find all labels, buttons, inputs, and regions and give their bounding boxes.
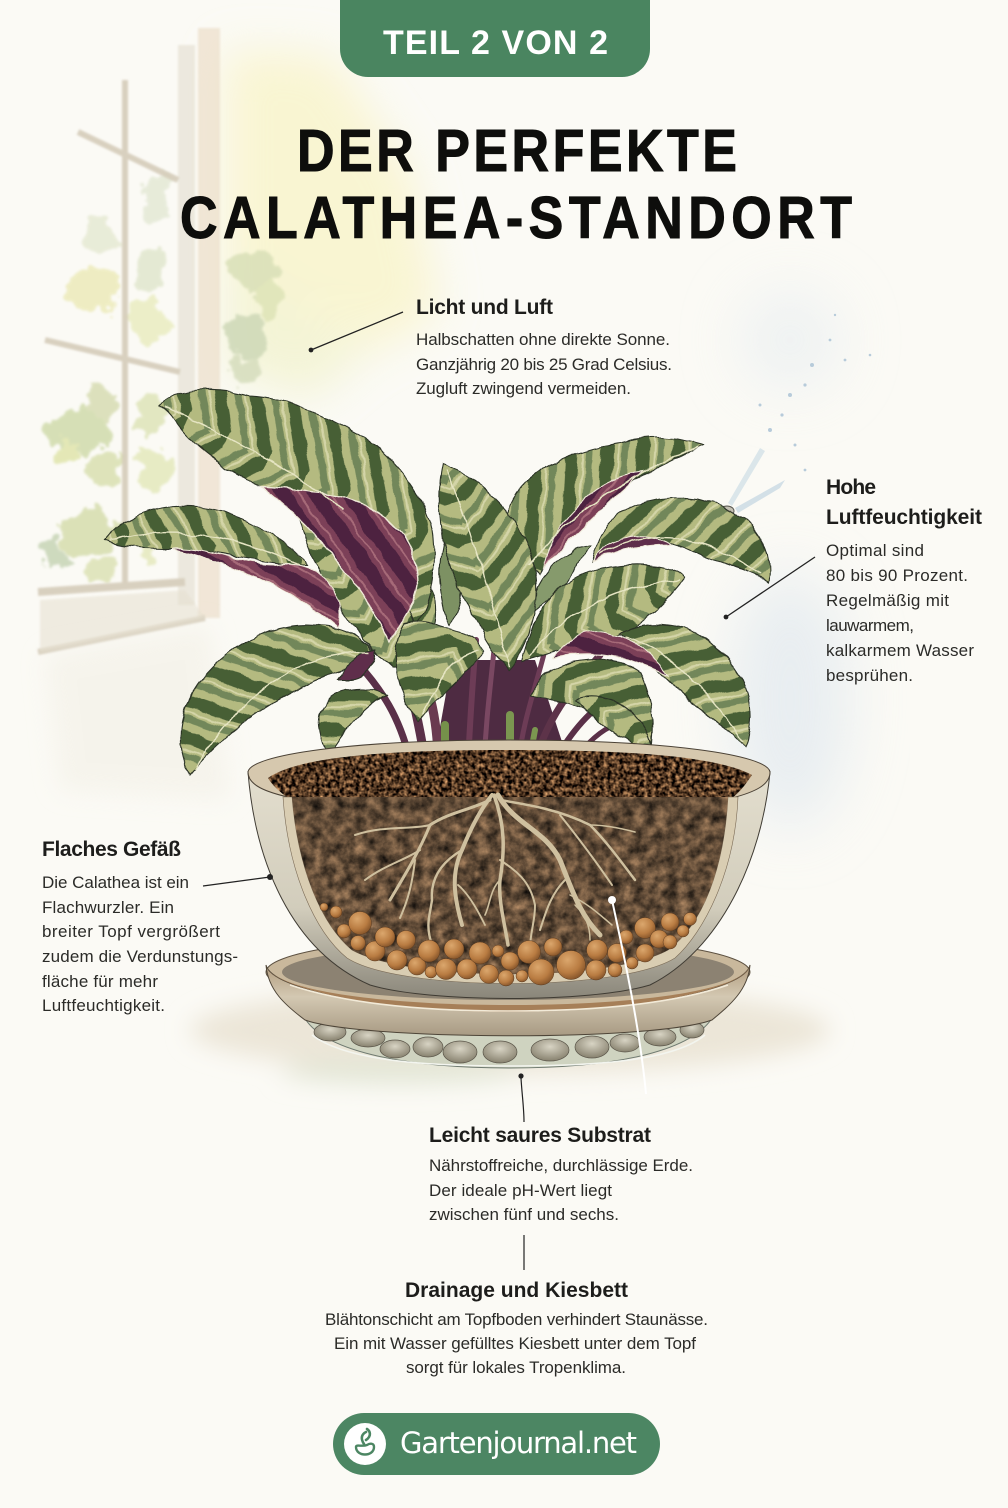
small back leaf, centre xyxy=(440,520,463,625)
sunlight wash xyxy=(225,50,440,400)
leaf 7 purple underside xyxy=(543,472,642,568)
callout: Leicht saures Substrat: Der ideale pH-Wert liegt xyxy=(429,1181,612,1200)
callout: Hohe Luftfeuchtigkeit: Luftfeuchtigkeit xyxy=(826,506,982,529)
leaf 1 large top left xyxy=(160,390,434,625)
leaf 1 purple underside xyxy=(262,487,418,642)
back leaf behind large leaf xyxy=(300,520,436,668)
callout: Licht und Luft: Ganzjährig 20 bis 25 Grad Celsius. xyxy=(416,355,672,374)
spray mist and nozzle xyxy=(720,314,871,516)
callout: Hohe Luftfeuchtigkeit: lauwarmem, xyxy=(826,616,914,635)
callout: Hohe Luftfeuchtigkeit: Hohe xyxy=(826,476,876,499)
leaf 9 middle right xyxy=(522,564,685,662)
callout: Flaches Gefäß: zudem die Verdunstungs- xyxy=(42,947,238,966)
callout: Licht und Luft: Licht und Luft xyxy=(416,296,553,319)
ground shadow wash xyxy=(190,986,830,1084)
window frame xyxy=(38,28,220,652)
saucer front xyxy=(266,965,750,1036)
leaf 11 lower middle right xyxy=(530,659,653,755)
callout: Drainage und Kiesbett: Ein mit Wasser gefülltes Kiesbett unter dem Topf xyxy=(334,1334,696,1353)
leaf 5 central tall xyxy=(439,463,537,672)
callout: Drainage und Kiesbett: sorgt für lokales Tropenklima. xyxy=(406,1358,626,1377)
callout: Leicht saures Substrat: Leicht saures Substrat xyxy=(429,1124,651,1147)
pot outer shell xyxy=(248,772,770,998)
leaf 3 purple fold xyxy=(338,650,375,680)
callout: Hohe Luftfeuchtigkeit: Regelmäßig mit xyxy=(826,591,949,610)
callout: Drainage und Kiesbett xyxy=(325,1235,708,1377)
leader: kiesbett to dish xyxy=(518,1073,524,1122)
leaf 4 small left xyxy=(319,688,385,755)
callout: Flaches Gefäß: breiter Topf vergrößert xyxy=(42,922,220,941)
callout: Flaches Gefäß: fläche für mehr xyxy=(42,972,158,991)
roots xyxy=(355,795,635,945)
stems xyxy=(345,625,620,772)
pot cutaway xyxy=(248,740,770,998)
soil surface xyxy=(268,750,752,798)
top banner xyxy=(340,0,650,77)
leaf 2 left xyxy=(105,506,307,565)
title: CALATHEA-STANDORT xyxy=(180,185,852,251)
callout: Licht und Luft: Zugluft zwingend vermeiden. xyxy=(416,379,631,398)
title: DER PERFEKTE xyxy=(297,118,737,184)
callout: Flaches Gefäß: Luftfeuchtigkeit. xyxy=(42,996,165,1015)
callout: Hohe Luftfeuchtigkeit: besprühen. xyxy=(826,666,913,685)
banner text: TEIL 2 VON 2 xyxy=(383,24,608,62)
footer text: Gartenjournal.net xyxy=(400,1426,637,1460)
small leaf lower right xyxy=(575,696,655,755)
leaf 3 lower left xyxy=(181,625,375,775)
glass dish with pebbles xyxy=(303,1015,714,1068)
wall shadow under window xyxy=(45,625,230,800)
callout: Flaches Gefäß: Die Calathea ist ein xyxy=(42,873,189,892)
plant leaves xyxy=(105,390,769,775)
back leaf, centre right xyxy=(530,545,590,615)
window sill wash xyxy=(40,590,205,652)
callout: Hohe Luftfeuchtigkeit: Optimal sind xyxy=(826,541,924,560)
inner wall strip xyxy=(283,797,738,984)
foliage outside window xyxy=(41,176,286,582)
callout: Leicht saures Substrat: Nährstoffreiche, durchlässige Erde. xyxy=(429,1156,693,1175)
callout: Flaches Gefäß: Flachwurzler. Ein xyxy=(42,898,174,917)
callout: Leicht saures Substrat: zwischen fünf und sechs. xyxy=(429,1205,619,1224)
blue mist wash xyxy=(730,290,850,830)
callout: Drainage und Kiesbett: Drainage und Kiesbett xyxy=(405,1279,628,1302)
leaf 6 centre left xyxy=(396,622,484,722)
callout: Hohe Luftfeuchtigkeit xyxy=(724,476,982,685)
footer logo pill xyxy=(333,1413,660,1475)
icon: plant in pot xyxy=(344,1423,386,1465)
leaf 10 purple underside xyxy=(553,631,668,675)
callout: Flaches Gefäß xyxy=(42,838,273,1015)
callout: Drainage und Kiesbett: Blähtonschicht am Topfboden verhindert Staunässe. xyxy=(325,1310,708,1329)
pot rim xyxy=(248,740,770,798)
callout: Licht und Luft: Halbschatten ohne direkte Sonne. xyxy=(416,330,670,349)
title xyxy=(180,118,852,251)
leaf 8 right xyxy=(592,498,769,582)
callout: Hohe Luftfeuchtigkeit: kalkarmem Wasser xyxy=(826,641,974,660)
callout: Flaches Gefäß: Flaches Gefäß xyxy=(42,838,181,861)
callout: Leicht saures Substrat xyxy=(429,896,693,1224)
callout: Hohe Luftfeuchtigkeit: 80 bis 90 Prozent. xyxy=(826,566,968,585)
leaf 2 purple underside xyxy=(172,548,340,628)
clay pebbles xyxy=(320,903,696,986)
leaf 7 upper right xyxy=(508,437,705,575)
soil cross-section xyxy=(292,797,728,974)
leaf 8 purple underside xyxy=(592,537,672,562)
midribs xyxy=(110,407,760,770)
callout: Licht und Luft xyxy=(309,296,672,398)
saucer back xyxy=(266,936,750,1008)
window illustration xyxy=(38,28,286,652)
leaf 10 lower right xyxy=(620,624,751,748)
